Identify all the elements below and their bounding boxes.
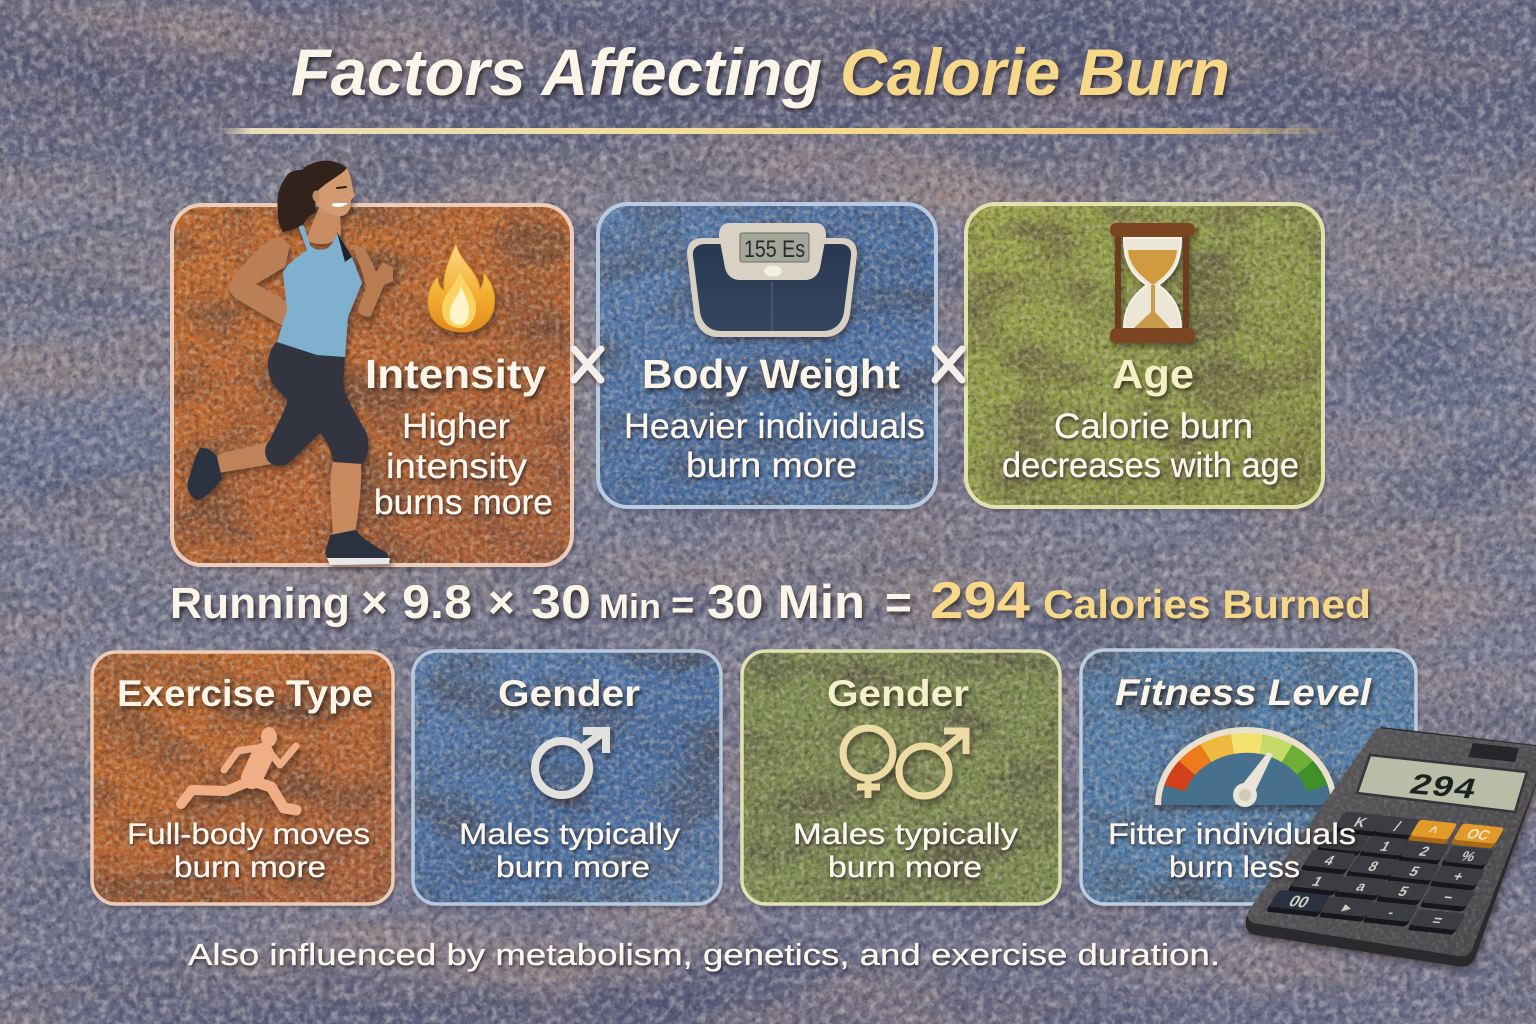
calculator keys — [1266, 811, 1505, 935]
description: body weight: Heavier individuals — [624, 407, 925, 446]
description: fitness level: Fitter individuals — [1108, 818, 1356, 851]
footer note: Also influenced by metabolism, genetics, and exercise duration. — [188, 937, 1220, 972]
formula: = — [671, 583, 694, 627]
formula: 294 — [930, 572, 1030, 630]
icon: flame — [428, 243, 495, 332]
calculator keys: K — [1351, 815, 1370, 831]
panel: gender both — [742, 651, 1060, 904]
heading: gender: Gender — [827, 673, 969, 714]
icon: bathroom scale: 155 Es — [744, 236, 805, 263]
calculator keys: 4 — [1321, 854, 1338, 869]
title divider — [218, 128, 1348, 134]
description: age: Calorie burn — [1054, 407, 1253, 446]
formula: 30 Min — [707, 575, 865, 628]
description: intensity: intensity — [386, 447, 528, 486]
heading: fitness level: Fitness Level — [1115, 672, 1372, 713]
description: body weight: burn more — [686, 446, 857, 485]
calculator keys: 5 — [1395, 885, 1411, 900]
calculator keys: / — [1391, 820, 1403, 835]
icon: bathroom scale — [687, 223, 857, 337]
description: fitness level — [1108, 818, 1356, 884]
icon: gauge — [1158, 730, 1334, 807]
icon: female and male symbols — [843, 728, 966, 798]
calculator keys: OC — [1463, 827, 1493, 844]
panel: body weight — [598, 204, 936, 507]
heading: age: Age — [1112, 351, 1194, 397]
heading: gender: Gender — [498, 673, 640, 714]
description: gender both: burn more — [828, 851, 982, 884]
calculator keys: 2 — [1416, 845, 1432, 860]
calculator keys: − — [1440, 891, 1456, 906]
panel: age — [966, 204, 1323, 507]
description: exercise type — [127, 818, 370, 884]
icon: hourglass — [1110, 223, 1195, 343]
calculator keys: 1 — [1309, 875, 1325, 890]
formula: × — [488, 576, 515, 628]
description: intensity: Higher — [402, 407, 510, 446]
formula — [170, 572, 1371, 630]
description: intensity — [374, 407, 553, 522]
heading: body weight: Body Weight — [642, 351, 900, 397]
panel: exercise type — [92, 652, 393, 904]
panel: intensity — [172, 161, 572, 565]
title: Factors Affecting — [291, 35, 822, 109]
description: gender male: burn more — [496, 851, 650, 884]
calculator keys: ^ — [1424, 825, 1441, 840]
calculator keys: 5 — [1406, 865, 1422, 880]
runner figure — [187, 161, 393, 565]
formula: Running — [170, 579, 350, 628]
description: body weight — [624, 407, 925, 485]
title — [291, 35, 1230, 109]
calculator keys: 8 — [1365, 860, 1381, 875]
formula: 30 — [531, 575, 591, 628]
icon: male symbol — [535, 731, 606, 795]
description: exercise type: burn more — [174, 851, 326, 884]
calculator keys: - — [1384, 906, 1398, 921]
description: fitness level: burn less — [1169, 851, 1300, 884]
description: exercise type: Full-body moves — [127, 818, 370, 851]
description: gender male — [459, 818, 680, 884]
calculator readout: 294 — [1408, 769, 1477, 809]
description: gender both — [793, 818, 1018, 884]
formula: Min — [599, 588, 661, 626]
formula: 9.8 — [402, 575, 472, 628]
formula: × — [361, 576, 388, 628]
calculator keys: 1 — [1377, 840, 1393, 855]
calculator keys: % — [1457, 849, 1478, 865]
title: Calorie Burn — [840, 35, 1230, 109]
multiply sign 1 — [574, 349, 601, 380]
calculator solar panel — [1468, 743, 1519, 762]
icon: calculator — [1246, 727, 1536, 967]
heading: exercise type: Exercise Type — [117, 673, 373, 714]
description: gender both: Males typically — [793, 818, 1018, 851]
heading: intensity: Intensity — [365, 351, 546, 397]
icon: running person — [181, 727, 296, 810]
formula: Calories Burned — [1043, 583, 1371, 627]
calculator keys: ▸ — [1338, 901, 1356, 916]
calculator keys: + — [1450, 870, 1466, 885]
panel: fitness level — [1081, 650, 1416, 904]
calculator keys: 00 — [1285, 892, 1313, 911]
description: age — [1002, 407, 1299, 485]
multiply sign 2 — [935, 349, 962, 380]
panel: gender male — [413, 651, 721, 904]
description: intensity: burns more — [374, 483, 553, 522]
calculator keys: = — [1429, 914, 1445, 929]
calculator display — [1357, 755, 1527, 812]
formula: = — [885, 576, 912, 628]
calculator keys: a — [1353, 880, 1370, 895]
description: age: decreases with age — [1002, 446, 1299, 485]
description: gender male: Males typically — [459, 818, 680, 851]
